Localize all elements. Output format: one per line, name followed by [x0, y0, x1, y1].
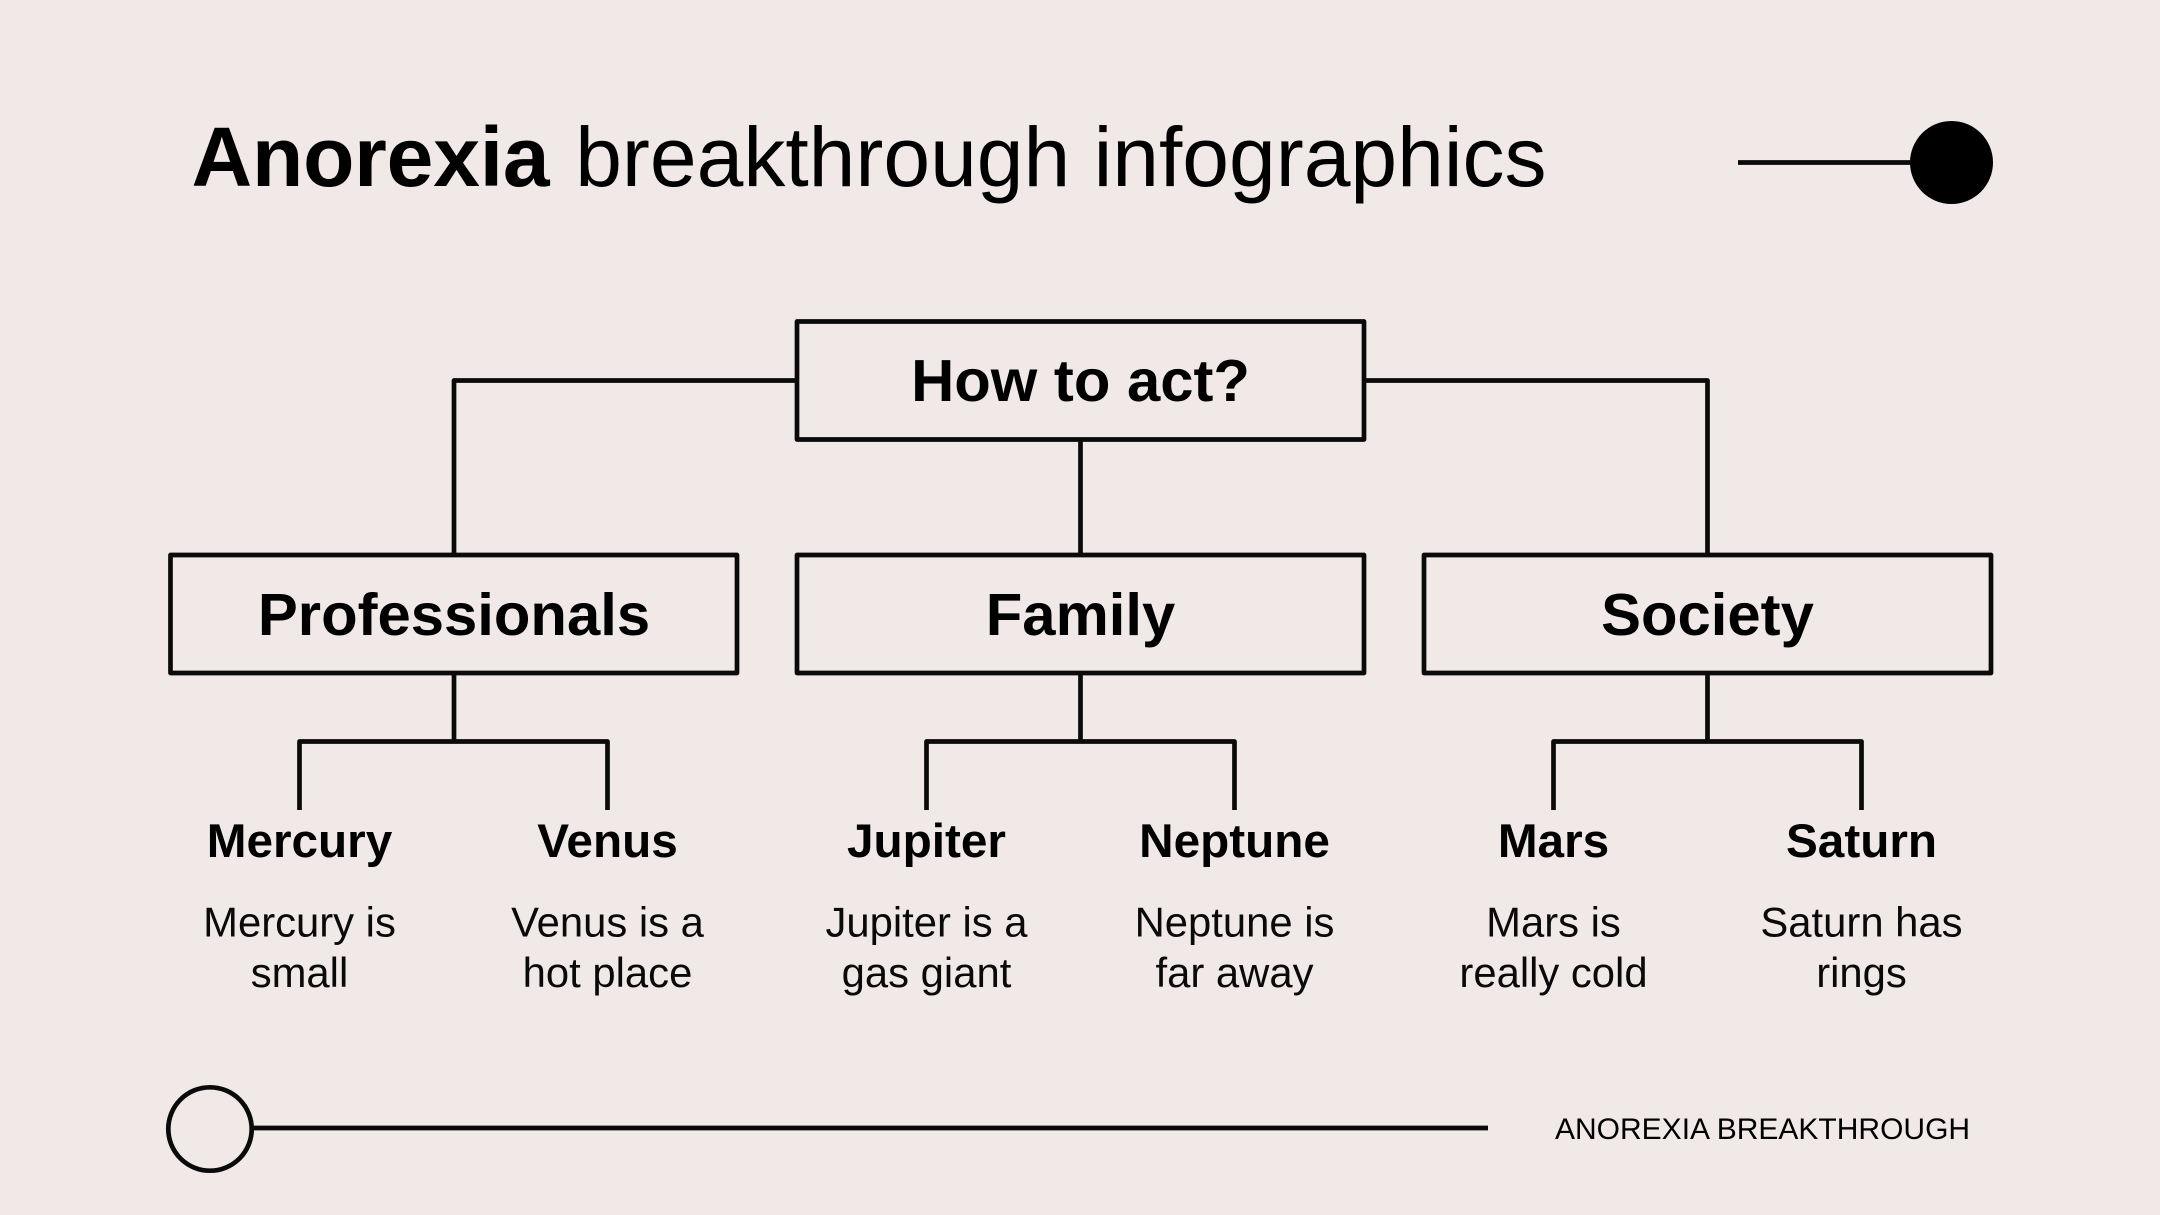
icon: outlined circle with line: [168, 1087, 1488, 1171]
box: Professionals: [170, 555, 737, 673]
item: Mars: really cold: [1459, 949, 1648, 996]
item: Neptune: Neptune is: [1135, 898, 1334, 946]
item: Saturn: Saturn: [1786, 815, 1937, 868]
connector: root to branches: [454, 380, 1708, 555]
item: Jupiter: Jupiter is a: [825, 898, 1028, 946]
item: Venus: Venus is a: [511, 898, 705, 946]
item: Mercury: [203, 815, 396, 996]
item: Jupiter: Jupiter: [847, 815, 1006, 868]
item: Neptune: Neptune: [1139, 815, 1330, 868]
item: Mercury: Mercury: [207, 815, 393, 868]
connector: Society children: [1554, 673, 1862, 810]
item: Neptune: [1135, 815, 1334, 996]
connector: Professionals children: [300, 673, 608, 810]
panel: Family: [797, 555, 1364, 996]
item: Jupiter: gas giant: [842, 949, 1012, 996]
box: How to act?: [797, 322, 1364, 440]
item: Venus: Venus: [537, 815, 678, 868]
item: Saturn: [1760, 815, 1963, 996]
box: Family: Family: [986, 581, 1175, 648]
box: Family: [797, 555, 1364, 673]
item: Mars: Mars: [1498, 815, 1609, 868]
connector: Family children: [926, 673, 1234, 810]
icon: line with filled circle: [1738, 121, 1993, 204]
item: Venus: hot place: [523, 949, 692, 996]
box: Professionals: Professionals: [258, 581, 650, 648]
item: Jupiter: [825, 815, 1028, 996]
box: Society: [1424, 555, 1991, 673]
title: Anorexia breakthrough infographics: [192, 110, 1547, 204]
item: Mercury: small: [251, 949, 348, 996]
item: Saturn: rings: [1816, 949, 1907, 996]
item: Mars: [1459, 815, 1648, 996]
item: Neptune: far away: [1156, 949, 1314, 996]
item: Mercury: Mercury is: [203, 898, 396, 946]
panel: Society: [1424, 555, 1991, 996]
footer label: ANOREXIA BREAKTHROUGH: [1555, 1113, 1970, 1146]
item: Mars: Mars is: [1486, 898, 1621, 946]
item: Venus: [511, 815, 705, 996]
box: How to act?: How to act?: [911, 347, 1250, 414]
box: Society: Society: [1601, 581, 1814, 648]
item: Saturn: Saturn has: [1760, 898, 1963, 946]
panel: Professionals: [170, 555, 737, 996]
